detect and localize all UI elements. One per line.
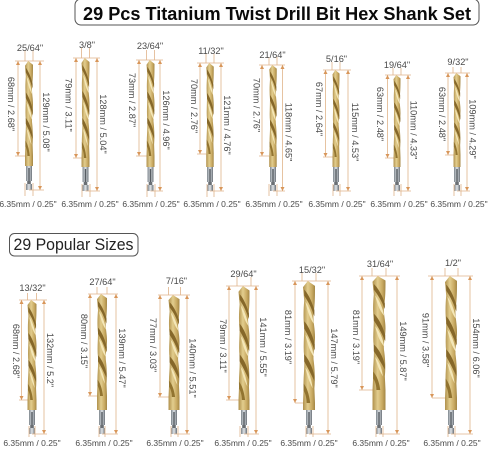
bit body <box>82 58 90 191</box>
dimensions <box>370 60 428 209</box>
dimensions <box>351 259 410 448</box>
bit body <box>372 276 386 434</box>
dimensions <box>61 40 119 209</box>
bit body <box>146 60 154 191</box>
drill bit 25/64 <box>0 43 57 209</box>
dimensions: 6.35mm / 0.25" <box>245 199 303 209</box>
drill bit 15/32 <box>280 265 339 448</box>
dimensions: 6.35mm / 0.25" <box>0 199 57 209</box>
dimensions: 23/64" <box>137 41 163 51</box>
dimensions <box>75 277 133 448</box>
dimensions: 6.35mm / 0.25" <box>280 438 338 448</box>
dimensions: 6.35mm / 0.25" <box>3 438 61 448</box>
dimensions: 79mm / 3.11" <box>63 78 73 132</box>
dimensions <box>420 258 481 448</box>
dimensions: 13/32" <box>19 283 46 293</box>
dimensions <box>122 41 180 209</box>
dimensions <box>3 283 61 448</box>
dimensions: 25/64" <box>17 43 43 53</box>
bit body <box>238 286 250 434</box>
drill bit 31/64 <box>351 259 410 448</box>
drill bit 1/2 <box>420 258 481 448</box>
heading: 29 Popular Sizes: 29 Popular Sizes <box>14 235 134 254</box>
dimensions: 68mm / 2.68" <box>11 324 21 378</box>
dimensions: 109mm / 4.29" <box>467 99 477 159</box>
bit body <box>303 281 315 434</box>
dimensions: 128mm / 5.04" <box>98 94 108 154</box>
dimensions: 27/64" <box>89 277 116 287</box>
dimensions: 129mm / 5.08" <box>41 92 51 152</box>
dimensions: 81mm / 3.19" <box>351 310 361 364</box>
dimensions: 81mm / 3.19" <box>283 310 293 364</box>
dimensions <box>0 43 57 209</box>
dimensions: 29/64" <box>230 269 257 279</box>
dimensions: 6.35mm / 0.25" <box>423 438 481 448</box>
dimensions: 6.35mm / 0.25" <box>214 438 272 448</box>
dimensions: 126mm / 4.96" <box>161 90 171 150</box>
dimensions: 115mm / 4.53" <box>350 103 360 161</box>
dimensions <box>308 54 366 209</box>
dimensions: 31/64" <box>367 259 393 269</box>
dimensions: 121mm / 4.76" <box>222 95 232 155</box>
dimensions: 139mm / 5.47" <box>117 328 127 388</box>
drill bit 23/64 <box>122 41 180 209</box>
dimensions: 15/32" <box>299 265 325 275</box>
dimensions: 70mm / 2.76" <box>189 79 199 133</box>
bit body <box>394 75 400 191</box>
dimensions: 132mm / 5.2" <box>45 333 55 387</box>
bit body <box>269 65 277 191</box>
drill bit 5/16 <box>308 54 366 209</box>
bit body <box>28 300 36 434</box>
dimensions: 19/64" <box>384 60 410 70</box>
dimensions: 147mm / 5.79" <box>329 328 339 388</box>
bit body <box>206 63 214 191</box>
dimensions: 6.35mm / 0.25" <box>122 199 180 209</box>
drill bit 13/32 <box>3 283 61 448</box>
dimensions: 68mm / 2.68" <box>6 77 16 131</box>
dimensions: 6.35mm / 0.25" <box>430 199 488 209</box>
drill bit 29/64 <box>214 269 272 448</box>
dimensions: 3/8" <box>79 40 95 50</box>
dimensions: 6.35mm / 0.25" <box>370 199 428 209</box>
bit body <box>445 276 457 434</box>
dimensions: 6.35mm / 0.25" <box>75 438 133 448</box>
drill bit 9/32 <box>430 57 488 209</box>
dimensions: 67mm / 2.64" <box>314 82 324 136</box>
dimensions <box>146 276 204 448</box>
dimensions: 140mm / 5.51" <box>187 338 197 398</box>
dimensions <box>280 265 339 448</box>
dimensions: 11/32" <box>198 46 224 56</box>
dimensions: 80mm / 3.15" <box>79 314 89 368</box>
dimensions: 110mm / 4.33" <box>408 101 418 159</box>
dimensions: 91mm / 3.58" <box>420 313 430 367</box>
dimensions: 6.35mm / 0.25" <box>61 199 119 209</box>
dimensions: 149mm / 5.87" <box>398 321 408 381</box>
dimensions: 73mm / 2.87" <box>127 73 137 127</box>
dimensions: 6.35mm / 0.25" <box>352 438 410 448</box>
dimensions: 154mm / 6.06" <box>471 318 481 378</box>
dimensions: 6.35mm / 0.25" <box>146 438 204 448</box>
dimensions: 1/2" <box>445 258 461 268</box>
dimensions: 5/16" <box>326 54 347 64</box>
bit body <box>454 73 460 191</box>
bit body <box>168 295 180 434</box>
drill bit 27/64 <box>75 277 133 448</box>
dimensions: 9/32" <box>447 57 469 67</box>
drill bit 19/64 <box>370 60 428 209</box>
dimensions: 7/16" <box>166 276 187 286</box>
dimensions <box>183 46 241 209</box>
dimensions: 21/64" <box>259 50 286 60</box>
drill bit 21/64 <box>245 50 303 209</box>
drill bit 7/16 <box>146 276 204 448</box>
dimensions: 70mm / 2.76" <box>251 78 261 132</box>
dimensions: 6.35mm / 0.25" <box>308 199 366 209</box>
dimensions: 63mm / 2.48" <box>375 87 385 141</box>
dimensions <box>214 269 272 448</box>
drill bit 3/8 <box>61 40 119 209</box>
dimensions: 141mm / 5.55" <box>258 317 268 377</box>
bit body <box>25 61 33 190</box>
title: 29 Pcs Titanium Twist Drill Bit Hex Shank Set <box>83 4 471 24</box>
dimensions: 118mm / 4.65" <box>283 103 293 161</box>
dimensions: 63mm / 2.48" <box>437 87 447 141</box>
dimensions: 6.35mm / 0.25" <box>183 199 241 209</box>
dimensions <box>245 50 303 209</box>
dimensions: 79mm / 3.11" <box>218 319 228 373</box>
drill bit 11/32 <box>183 46 241 209</box>
dimensions: 77mm / 3.03" <box>148 318 158 372</box>
bit body <box>97 294 107 434</box>
dimensions <box>430 57 488 209</box>
bit body <box>332 70 340 191</box>
